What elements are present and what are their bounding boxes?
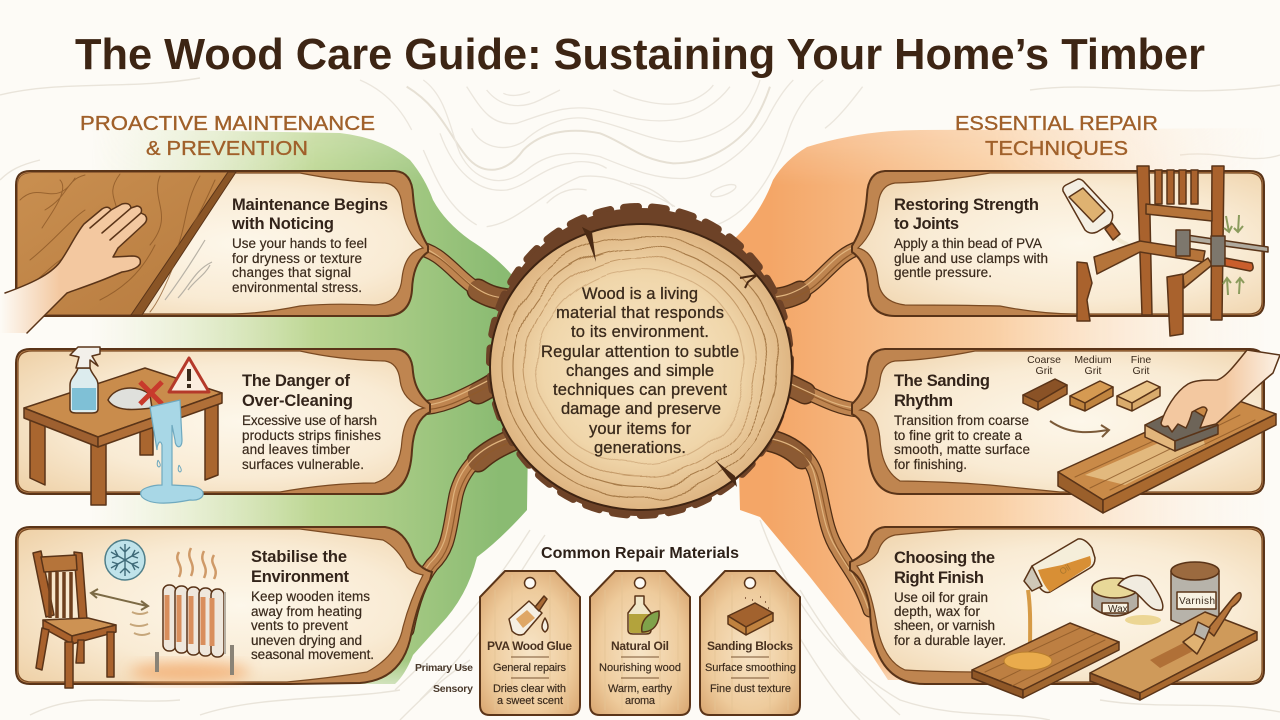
text block <box>251 548 374 662</box>
text block: Right Finish <box>894 569 984 587</box>
text block: Use oil for grain <box>894 590 988 605</box>
heading: common repair materials: Common Repair Materials <box>541 545 739 562</box>
tag: natural oil: Nourishing wood <box>599 662 681 674</box>
tag: pva wood glue: Dries clear with <box>493 683 566 695</box>
text block: to Joints <box>894 215 959 233</box>
icon: glue <box>509 596 548 635</box>
central message: material that responds <box>556 304 724 322</box>
text block: and leaves timber <box>242 442 350 457</box>
central message: generations. <box>594 439 686 457</box>
icon: radiator <box>157 585 232 675</box>
text block: Stabilise the <box>251 548 347 566</box>
text block <box>894 549 1006 648</box>
text block <box>242 372 381 472</box>
icon: cloth with red x <box>108 382 162 410</box>
icon: paint brush <box>1183 593 1241 654</box>
text block: Over-Cleaning <box>242 392 353 410</box>
icon: wood board <box>1058 396 1276 513</box>
heading: essential repair: TECHNIQUES <box>985 138 1128 160</box>
tag: pva wood glue: General repairs <box>493 662 566 674</box>
icon: hand with sander <box>1145 350 1280 451</box>
text block: Rhythm <box>894 392 953 410</box>
central message: your items for <box>589 420 692 438</box>
tag: sanding blocks: Fine dust texture <box>710 683 791 695</box>
icon: chair under repair <box>1077 166 1224 336</box>
icon: oiled board <box>972 623 1119 698</box>
tree branches <box>405 246 872 632</box>
arrow: coarse to fine <box>1050 421 1109 437</box>
tag: pva wood glue: PVA Wood Glue <box>487 639 572 653</box>
icon: sanding block <box>728 597 773 635</box>
icon: oil bottle with leaf <box>628 596 659 634</box>
icon: clamp <box>1176 230 1268 271</box>
arrow: chair to radiator <box>91 589 148 610</box>
text block: environmental stress. <box>232 280 362 295</box>
text block <box>894 372 1030 472</box>
central message: Wood is a living <box>582 285 698 303</box>
central message: changes and simple <box>566 362 714 380</box>
central message: techniques can prevent <box>553 381 727 399</box>
panel: the sanding rhythm <box>852 349 1280 513</box>
text block: for finishing. <box>894 457 967 472</box>
icon: heat waves <box>177 548 216 579</box>
text block: for dryness or texture <box>232 251 362 266</box>
text block: Excessive use of harsh <box>242 413 377 428</box>
icon: glue bottle <box>1063 179 1129 265</box>
text block: to fine grit to create a <box>894 428 1022 443</box>
row labels <box>415 662 473 695</box>
text block: Transition from coarse <box>894 413 1029 428</box>
text block: Apply a thin bead of PVA <box>894 236 1042 251</box>
tag: sanding blocks: Surface smoothing <box>705 662 796 674</box>
icon: hand on wood <box>0 204 147 333</box>
text block: depth, wax for <box>894 604 980 619</box>
text block: seasonal movement. <box>251 647 374 662</box>
text block: for a durable layer. <box>894 633 1006 648</box>
draught lines <box>130 612 150 635</box>
tag: natural oil: aroma <box>625 695 656 707</box>
central message: Regular attention to subtle <box>541 343 739 361</box>
heat glow <box>130 662 250 682</box>
orange backdrop <box>736 128 1216 680</box>
text block: with Noticing <box>231 215 334 233</box>
icon: varnish can: Varnish <box>1179 596 1215 607</box>
row labels: Sensory <box>433 683 473 695</box>
heading: essential repair <box>955 113 1158 160</box>
text block: Keep wooden items <box>251 589 370 604</box>
central message: damage and preserve <box>561 400 721 418</box>
tag: natural oil <box>590 571 690 715</box>
tag: sanding blocks <box>700 571 800 715</box>
icon: warning triangle <box>169 358 209 392</box>
text block: away from heating <box>251 604 362 619</box>
icon: wax tin <box>1092 575 1163 625</box>
tag: pva wood glue: a sweet scent <box>497 695 563 707</box>
text block <box>894 196 1048 280</box>
icon: sanding blocks: Grit <box>1133 365 1150 377</box>
panel: restoring strength to joints <box>852 166 1268 336</box>
icon: sanding blocks: Grit <box>1085 365 1102 377</box>
text block: The Danger of <box>242 372 350 390</box>
tag: sanding blocks: Sanding Blocks <box>707 639 793 653</box>
icon: oil bottle pouring <box>1024 539 1095 655</box>
tag: natural oil: Warm, earthy <box>608 683 672 695</box>
text block: Choosing the <box>894 549 995 567</box>
heading: proactive maintenance: PROACTIVE MAINTENANCE <box>80 113 375 135</box>
icon: stress lines <box>165 240 212 300</box>
text block: Restoring Strength <box>894 196 1039 214</box>
text block: products strips finishes <box>242 428 381 443</box>
text block: vents to prevent <box>251 618 348 633</box>
icon: sanding blocks: Fine <box>1131 354 1151 366</box>
icon: sanding blocks: Medium <box>1074 354 1112 366</box>
tag: natural oil: Natural Oil <box>611 639 669 653</box>
icon: chair <box>33 551 116 688</box>
heading: essential repair: ESSENTIAL REPAIR <box>955 113 1158 135</box>
text block: changes that signal <box>232 265 351 280</box>
text block: gentle pressure. <box>894 265 992 280</box>
text block: glue and use clamps with <box>894 251 1048 266</box>
green backdrop <box>118 130 528 684</box>
row labels: Primary Use <box>415 662 473 674</box>
heading: proactive maintenance: & PREVENTION <box>146 138 308 160</box>
text block: sheen, or varnish <box>894 618 995 633</box>
central message <box>541 285 739 457</box>
arrows: pressure <box>1223 215 1244 295</box>
icon: snowflake <box>105 540 145 580</box>
text block: smooth, matte surface <box>894 442 1030 457</box>
central message: to its environment. <box>571 323 709 341</box>
icon: varnish can <box>1171 562 1219 626</box>
stump <box>489 207 793 516</box>
icon: wax tin: Wax <box>1108 604 1128 615</box>
icon: oil bottle pouring: Oil <box>1058 562 1072 577</box>
text block: Use your hands to feel <box>232 236 367 251</box>
text block: uneven drying and <box>251 633 362 648</box>
heading: proactive maintenance <box>80 113 375 160</box>
text block <box>231 196 388 295</box>
icon: varnished board <box>1090 612 1257 700</box>
icon: water spill <box>141 400 203 503</box>
title: The Wood Care Guide: Sustaining Your Home’s Timber <box>75 30 1205 79</box>
text block: Maintenance Begins <box>232 196 388 214</box>
panel: stabilise the environment <box>16 527 432 688</box>
icon: sanding blocks <box>1023 354 1160 411</box>
icon: spray bottle <box>70 347 100 413</box>
text block: Environment <box>251 568 350 586</box>
text block: The Sanding <box>894 372 990 390</box>
text block: surfaces vulnerable. <box>242 457 364 472</box>
panel: the danger of over-cleaning <box>16 347 430 505</box>
icon: sanding blocks: Grit <box>1036 365 1053 377</box>
panel: choosing the right finish <box>850 527 1264 700</box>
tag: pva wood glue <box>480 571 580 715</box>
icon: table <box>24 368 222 505</box>
wood surface <box>18 172 236 315</box>
icon: sanding blocks: Coarse <box>1027 354 1061 366</box>
panel: maintenance begins with noticing <box>0 171 428 333</box>
